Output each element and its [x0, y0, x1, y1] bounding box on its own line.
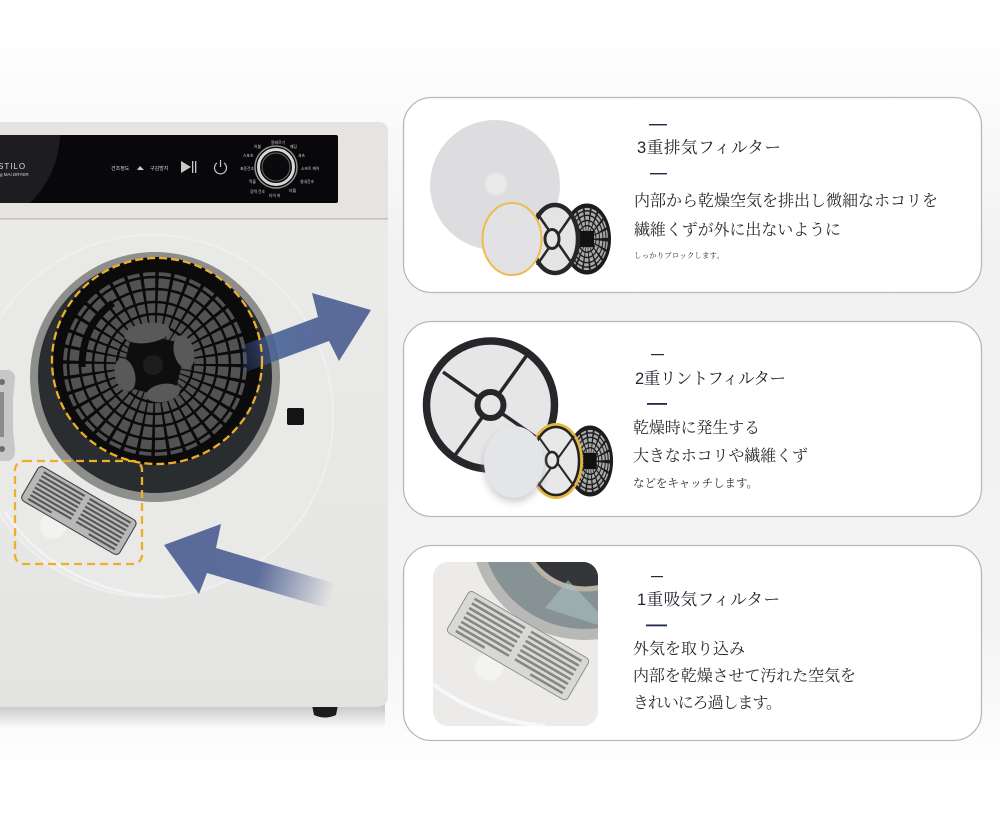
- door surround ring: [0, 235, 333, 597]
- filter set image: [426, 341, 613, 502]
- dryer body: [0, 122, 388, 707]
- card: 1st intake filter: [402, 544, 982, 742]
- ring highlight: [433, 684, 545, 726]
- highlighted disc: [482, 203, 542, 275]
- description: などをキャッチします。: [633, 477, 758, 490]
- description: 内部を乾燥させて汚れた空気を: [633, 667, 856, 685]
- description: きれいにろ過します。: [633, 694, 782, 712]
- grid filter: [563, 203, 611, 275]
- dial labels: 타월: [289, 188, 296, 193]
- vent post: [475, 653, 503, 681]
- door rim: [476, 562, 598, 640]
- dial labels: [240, 140, 320, 198]
- heading: 3重排気フィルター: [637, 138, 781, 157]
- card: 3rd exhaust filter: [404, 98, 982, 292]
- yellow dashed filter outline: [52, 258, 262, 464]
- top panel: [0, 122, 388, 218]
- dial labels: 실내건조: [300, 179, 314, 184]
- description: 繊維くずが外に出ないように: [634, 221, 841, 239]
- heading: 2重リントフィルター: [635, 369, 786, 388]
- dial labels: 셔츠: [298, 153, 305, 158]
- white disc: [484, 426, 544, 498]
- description: しっかりブロックします。: [634, 251, 724, 260]
- icon: steam: [137, 166, 144, 170]
- heading: 1重吸気フィルター: [637, 590, 780, 609]
- dial labels: 이불: [254, 144, 261, 149]
- door glass outer rim: [30, 252, 280, 502]
- card: 2nd lint filter: [404, 322, 982, 516]
- intake vent: [20, 465, 138, 556]
- highlighted ring filter: [530, 424, 582, 498]
- large ring filter: [426, 341, 554, 469]
- description: 乾燥時に発生する: [633, 419, 760, 437]
- disc shadow: [484, 430, 544, 502]
- accent line: [650, 173, 667, 174]
- dial labels: 패딩: [290, 144, 297, 149]
- filter lobes: [111, 320, 198, 405]
- filter inner arc: [82, 303, 113, 367]
- description: [633, 640, 856, 712]
- description: [634, 192, 938, 260]
- control display: g MAI DRYER: [0, 172, 29, 177]
- description: 内部から乾燥空気を排出し微細なホコリを: [634, 192, 938, 210]
- yellow dashed vent box: [15, 461, 142, 564]
- dryer shadow: [0, 704, 385, 728]
- dial labels: 강력 건조: [250, 189, 266, 194]
- icon: play pause: [181, 161, 196, 173]
- dryer foot: [312, 705, 338, 718]
- dryer illustration: [0, 122, 388, 728]
- dial labels: 알레르기: [271, 140, 285, 145]
- control display: 구김방지: [150, 165, 168, 172]
- intake arrow: [164, 524, 333, 609]
- vent: [446, 590, 590, 701]
- exhaust filter mesh: [53, 257, 261, 465]
- lower door ring highlight: [5, 512, 165, 597]
- drum: [530, 562, 598, 592]
- description: [633, 419, 808, 490]
- hinges: [0, 370, 15, 461]
- ring filter: [532, 205, 578, 273]
- dial labels: 스포츠: [243, 154, 254, 158]
- icon: power: [214, 160, 226, 174]
- control display: [0, 135, 338, 203]
- dial labels: 먹물: [249, 179, 256, 184]
- intake filter photo: [433, 562, 598, 726]
- accent line: [646, 624, 667, 626]
- dial labels: 표준건조: [240, 166, 254, 171]
- filter set image: [430, 120, 611, 275]
- control labels: 건조정도: [111, 165, 130, 172]
- dial labels: 소프트 케어: [301, 166, 320, 171]
- accent line: [649, 124, 667, 125]
- description: 大きなホコリや繊維くず: [633, 447, 808, 465]
- accent line: [651, 354, 664, 355]
- knob: [287, 408, 304, 425]
- accent line: [651, 576, 663, 577]
- dial labels: 타이 머: [269, 193, 281, 198]
- door glass: [488, 562, 598, 629]
- panel reflection: [0, 135, 60, 203]
- grid filter: [567, 425, 613, 497]
- description: 外気を取り込み: [633, 640, 745, 658]
- door glass interior: [38, 259, 272, 493]
- dial: [255, 146, 297, 188]
- filter hub: [119, 331, 187, 399]
- exhaust arrow: [243, 293, 371, 373]
- accent line: [647, 403, 667, 405]
